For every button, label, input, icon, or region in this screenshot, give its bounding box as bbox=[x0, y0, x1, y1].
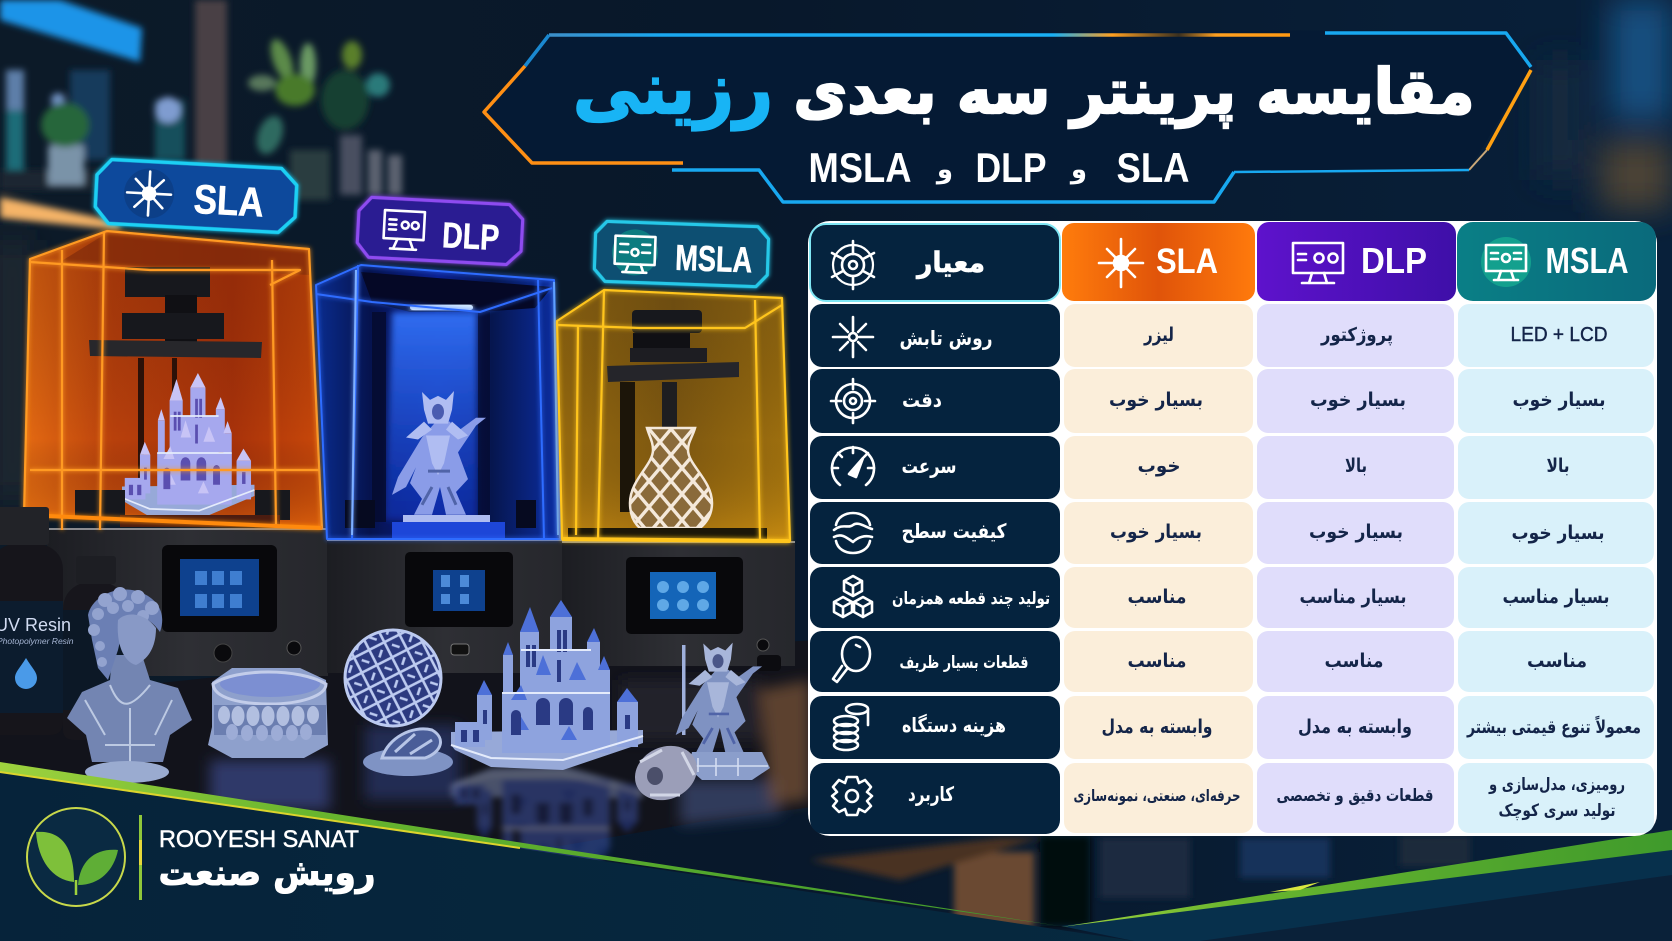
row: accuracy: دقت bbox=[902, 388, 942, 412]
subheading bbox=[808, 144, 1190, 191]
printer: MSLA bbox=[557, 290, 795, 671]
row: accuracy: بسیار خوب bbox=[1512, 389, 1606, 411]
row: very delicate parts: مناسب bbox=[1527, 650, 1587, 672]
model: castle bbox=[451, 600, 643, 770]
bottle: UV resin bbox=[0, 507, 74, 735]
label: DLP: DLP bbox=[441, 214, 500, 258]
row: application: قطعات دقیق و تخصصی bbox=[1276, 786, 1434, 806]
resin bottles bbox=[0, 507, 127, 740]
icon: LCD monitor bbox=[611, 229, 659, 276]
row: speed: بالا bbox=[1345, 455, 1367, 477]
header: SLA: SLA bbox=[1156, 242, 1218, 281]
printed vase bbox=[630, 428, 712, 528]
header row bbox=[810, 222, 1656, 301]
logo circle bbox=[27, 808, 125, 906]
row: application: تولید سری کوچک bbox=[1498, 801, 1616, 821]
bottles bbox=[6, 70, 24, 170]
title panel bbox=[484, 30, 1531, 202]
glowing edges bbox=[557, 290, 790, 541]
screen bbox=[626, 557, 743, 634]
green stripe left bbox=[0, 762, 1060, 926]
subheading: MSLA bbox=[808, 144, 912, 191]
row: very delicate parts bbox=[810, 631, 1654, 692]
row: very delicate parts: مناسب bbox=[1324, 650, 1384, 672]
model: warrior bbox=[676, 643, 770, 780]
row: irradiation method: پروژکتور bbox=[1320, 324, 1393, 346]
label: MSLA: MSLA bbox=[675, 237, 753, 280]
row: application: رومیزی، مدل‌سازی و bbox=[1488, 775, 1625, 795]
icon: drop bbox=[15, 658, 37, 689]
enclosure bbox=[557, 290, 790, 541]
border bbox=[484, 33, 1531, 202]
row: surface quality: بسیار خوب bbox=[1512, 522, 1604, 544]
row: speed: سرعت bbox=[902, 454, 956, 478]
castle reflection bbox=[451, 766, 643, 905]
logo bbox=[27, 808, 376, 906]
label: SLA bbox=[94, 159, 298, 233]
screen bbox=[162, 545, 277, 632]
label: MSLA bbox=[594, 221, 769, 287]
subheading: DLP bbox=[976, 144, 1046, 191]
big plant bbox=[248, 36, 402, 200]
icon: laser bbox=[123, 167, 175, 220]
printed castle bbox=[122, 373, 254, 519]
heading: رزینی bbox=[573, 46, 773, 131]
row: surface quality: بسیار خوب bbox=[1110, 521, 1202, 543]
row: application: کاربرد bbox=[908, 782, 954, 806]
header: DLP bbox=[1257, 222, 1456, 301]
model: lattice ball bbox=[345, 630, 441, 726]
base bbox=[327, 539, 562, 673]
model: shell bbox=[626, 736, 706, 810]
row: machine cost: وابسته به مدل bbox=[1102, 716, 1212, 738]
row: application: حرفه‌ای، صنعتی، نمونه‌سازی bbox=[1074, 786, 1240, 805]
row: very delicate parts: قطعات بسیار ظریف bbox=[900, 653, 1028, 673]
row: simultaneous parts: بسیار مناسب bbox=[1502, 586, 1610, 608]
printed models bbox=[67, 587, 770, 810]
label: DLP bbox=[357, 197, 523, 265]
header: criterion: معیار bbox=[915, 246, 985, 279]
enclosure bbox=[316, 265, 560, 539]
header: criterion bbox=[810, 224, 1060, 301]
header: MSLA bbox=[1457, 222, 1656, 301]
logo: ROOYESH SANAT bbox=[159, 826, 359, 853]
row: accuracy: بسیار خوب bbox=[1310, 389, 1406, 411]
base bbox=[47, 528, 328, 676]
footer band bbox=[0, 762, 1672, 941]
model: bust bbox=[67, 587, 192, 783]
header: SLA bbox=[1062, 223, 1255, 301]
icon: projector monitor bbox=[383, 210, 425, 250]
row: accuracy bbox=[810, 369, 1654, 433]
enclosure bbox=[24, 231, 322, 528]
row: speed bbox=[810, 436, 1654, 499]
model: small lattice bbox=[363, 729, 453, 776]
bottle: back bbox=[63, 556, 127, 740]
row: machine cost: هزینه دستگاه bbox=[902, 713, 1006, 737]
comparison table bbox=[808, 221, 1657, 836]
row: very delicate parts: مناسب bbox=[1128, 650, 1186, 672]
green stripe right bbox=[1061, 830, 1672, 927]
printed warrior bbox=[392, 391, 486, 515]
warm shelf strip bbox=[0, 197, 120, 230]
subheading: و bbox=[1069, 155, 1087, 185]
printer: DLP bbox=[316, 265, 562, 673]
row: simultaneous parts: بسیار مناسب bbox=[1300, 586, 1406, 608]
row: irradiation method: لیزر bbox=[1143, 324, 1174, 346]
row: simultaneous parts: مناسب bbox=[1128, 586, 1186, 608]
row: irradiation method: روش تابش bbox=[900, 326, 992, 350]
header: DLP: DLP bbox=[1361, 240, 1427, 281]
icon: gear bbox=[832, 241, 874, 289]
heading: مقایسه پرینتر سه بعدی bbox=[794, 55, 1474, 128]
model: dental bbox=[208, 668, 328, 758]
row: machine cost: وابسته به مدل bbox=[1298, 716, 1412, 738]
shelf light bbox=[0, 0, 142, 62]
subheading: و bbox=[935, 155, 953, 185]
row: simultaneous parts: تولید چند قطعه همزمان bbox=[892, 589, 1050, 609]
arm and platform bbox=[89, 267, 262, 488]
row: application bbox=[810, 763, 1654, 834]
row: speed: خوب bbox=[1138, 455, 1180, 477]
light beam bbox=[385, 312, 477, 520]
row: irradiation method bbox=[810, 304, 1654, 367]
heading bbox=[573, 46, 1474, 131]
row: surface quality: بسیار خوب bbox=[1309, 521, 1403, 543]
row: surface quality: کیفیت سطح bbox=[902, 519, 1007, 543]
base bbox=[562, 541, 795, 666]
row: machine cost bbox=[810, 696, 1654, 759]
row: irradiation method: LED + LCD bbox=[1510, 324, 1608, 346]
glowing edges bbox=[24, 231, 322, 530]
subheading: SLA bbox=[1116, 144, 1190, 191]
pillar bbox=[195, 0, 227, 165]
row: accuracy: بسیار خوب bbox=[1109, 389, 1203, 411]
small plant bbox=[41, 103, 89, 147]
arm and rod bbox=[607, 310, 739, 512]
row: speed: بالا bbox=[1546, 455, 1570, 477]
table surface bbox=[0, 640, 820, 905]
logo: رویش صنعت bbox=[158, 853, 376, 894]
printer: SLA bbox=[24, 231, 328, 676]
screen bbox=[405, 552, 513, 627]
glowing edges bbox=[316, 265, 560, 539]
label: SLA: SLA bbox=[193, 176, 265, 226]
row: simultaneous parts bbox=[810, 567, 1654, 628]
row: surface quality bbox=[810, 502, 1654, 564]
lower right blurred floor bbox=[810, 836, 1470, 927]
header: MSLA: MSLA bbox=[1546, 240, 1628, 281]
